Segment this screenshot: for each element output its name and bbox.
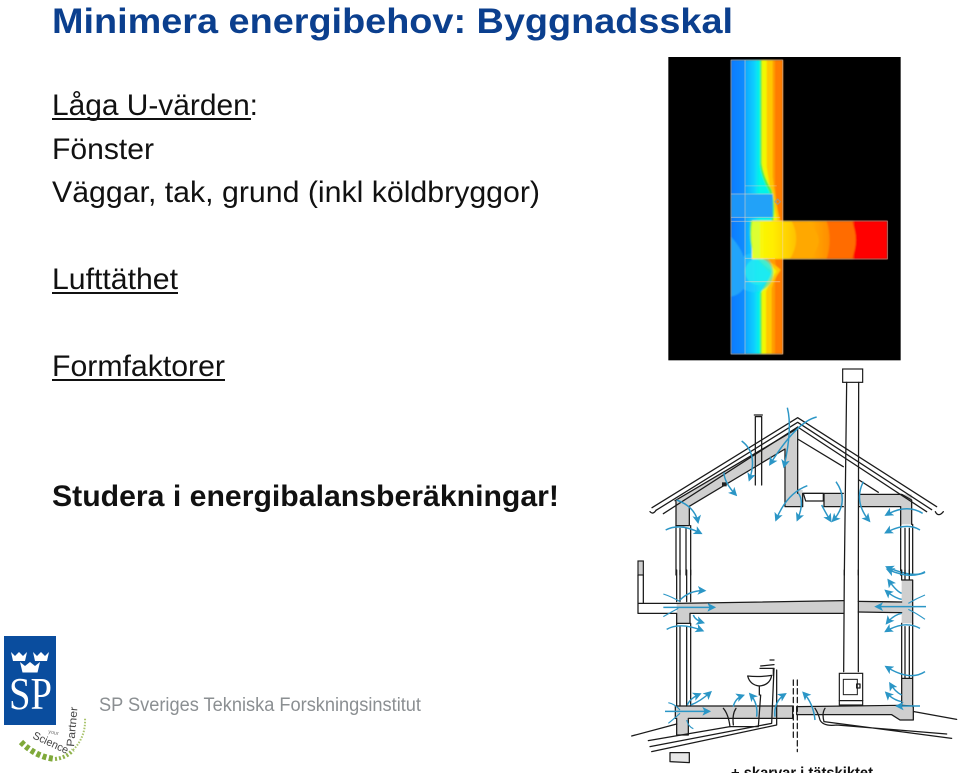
organisation name: SP Sveriges Tekniska Forskningsinstitut xyxy=(99,695,422,716)
wash basin and tap xyxy=(748,660,774,695)
roof and framing lines xyxy=(650,418,943,575)
icon: three crowns xyxy=(11,652,49,672)
ground and drains xyxy=(632,668,957,763)
thermal bridge image xyxy=(668,57,901,360)
text: airtightness: Lufttäthet xyxy=(52,263,178,296)
SP logo: SP xyxy=(9,669,52,719)
air leak arrows, lower floors xyxy=(663,569,926,729)
roof insulation and ceiling xyxy=(675,428,912,526)
house cross-section: attic xyxy=(638,369,943,575)
text: energy balance call to action: Studera i energibalansberäkningar! xyxy=(52,480,559,513)
tagline: your Science Partner: Partner xyxy=(65,706,81,747)
text: form factors: Formfaktorer xyxy=(52,350,225,383)
window hatch xyxy=(722,482,727,486)
SP logo xyxy=(4,636,56,725)
wood stove xyxy=(839,673,863,705)
small pipe on left xyxy=(638,561,643,575)
tagline: your Science Partner: Science xyxy=(31,730,70,757)
green dashed arc xyxy=(21,718,85,759)
text block: low U-values: Låga U-värden: xyxy=(52,89,258,122)
building outlines xyxy=(638,570,913,735)
text block: low U-values: Väggar, tak, grund (inkl köldbryggor) xyxy=(52,176,540,209)
air leak arrows, attic xyxy=(666,408,925,574)
chimney xyxy=(843,369,863,575)
house cross-section: lower floors xyxy=(632,569,957,763)
tagline: your Science Partner: your xyxy=(48,729,59,737)
tagline: your Science Partner xyxy=(21,706,85,759)
floor slabs and insulation xyxy=(671,580,913,763)
title: Minimera energibehov: Byggnadsskal xyxy=(52,2,733,41)
text block: low U-values xyxy=(52,89,540,209)
vent pipe xyxy=(754,415,762,485)
text block: low U-values: Fönster xyxy=(52,133,154,166)
